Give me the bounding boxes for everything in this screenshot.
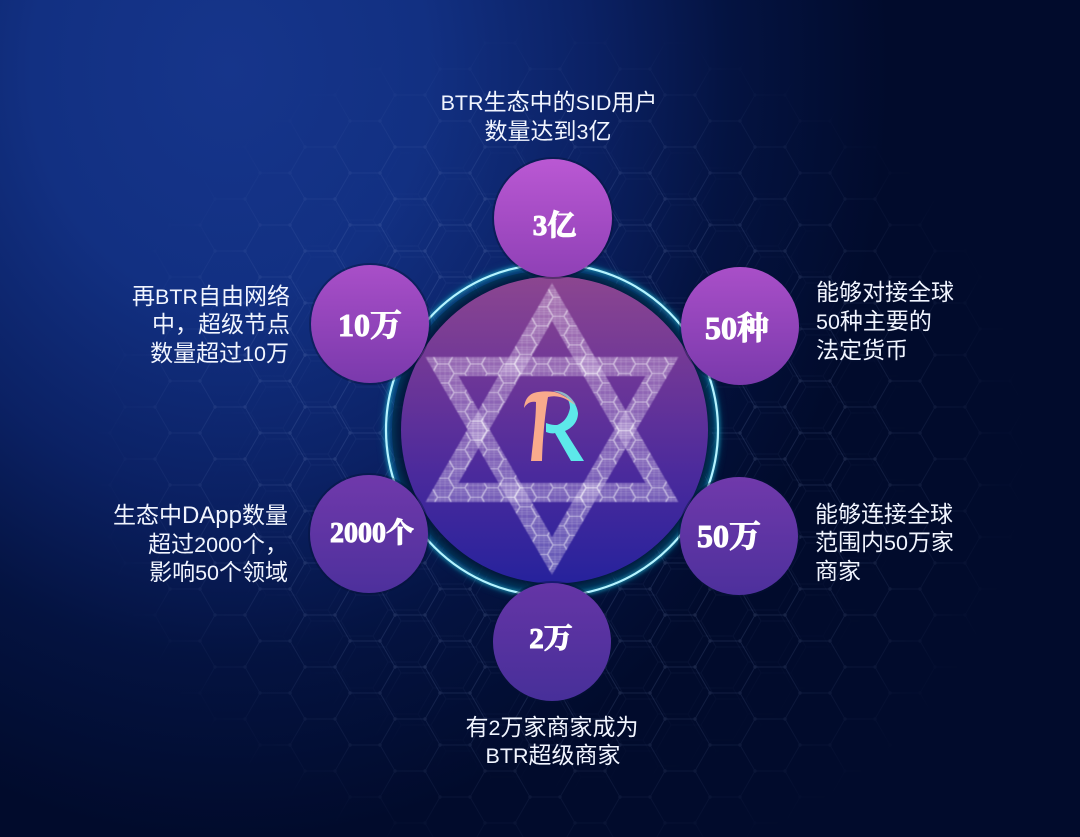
caption: upper right xyxy=(816,279,954,363)
caption: lower right: 商家 xyxy=(815,558,861,584)
central disc xyxy=(401,276,708,584)
node: 50种: 50种 xyxy=(705,310,769,346)
node: 3亿: 3亿 xyxy=(533,209,576,242)
node: 10万 xyxy=(309,263,431,385)
node: 3亿 xyxy=(492,157,614,279)
caption: lower left: 影响50个领域 xyxy=(149,559,288,585)
caption: upper right: 法定货币 xyxy=(816,337,908,363)
node: 2万: 2万 xyxy=(529,623,573,655)
caption: lower right: 范围内50万家 xyxy=(815,529,954,555)
node: 2000个 xyxy=(308,473,430,595)
caption: top xyxy=(441,89,657,144)
caption: upper left xyxy=(132,283,290,366)
caption: lower left xyxy=(113,502,288,585)
caption: lower left: 生态中DApp数量 xyxy=(113,502,288,529)
caption: upper right: 50种主要的 xyxy=(816,308,932,334)
caption: bottom xyxy=(466,714,638,768)
caption: bottom: 有2万家商家成为 xyxy=(466,714,638,740)
node: 2万 xyxy=(491,581,613,703)
caption: bottom: BTR超级商家 xyxy=(486,742,620,768)
node: 10万: 10万 xyxy=(338,307,402,343)
caption: lower right xyxy=(815,501,954,584)
upward triangle xyxy=(442,302,662,492)
node: 50种 xyxy=(679,265,801,387)
star of David mesh xyxy=(442,302,662,556)
icon: R logo xyxy=(524,391,584,461)
glowing ring xyxy=(386,264,718,596)
caption: top: BTR生态中的SID用户 xyxy=(441,89,657,115)
node: 50万 xyxy=(678,475,800,597)
node: 50万: 50万 xyxy=(697,518,761,554)
caption: top: 数量达到3亿 xyxy=(485,118,611,144)
caption: lower right: 能够连接全球 xyxy=(815,501,953,527)
node: 2000个: 2000个 xyxy=(330,517,414,549)
caption: upper right: 能够对接全球 xyxy=(816,279,954,305)
caption: lower left: 超过2000个， xyxy=(148,531,288,557)
caption: upper left: 再BTR自由网络 xyxy=(132,283,290,309)
background hexagon network xyxy=(168,93,971,826)
caption: upper left: 数量超过10万 xyxy=(150,340,289,366)
caption: upper left: 中，超级节点 xyxy=(152,311,290,337)
downward triangle xyxy=(442,366,662,556)
